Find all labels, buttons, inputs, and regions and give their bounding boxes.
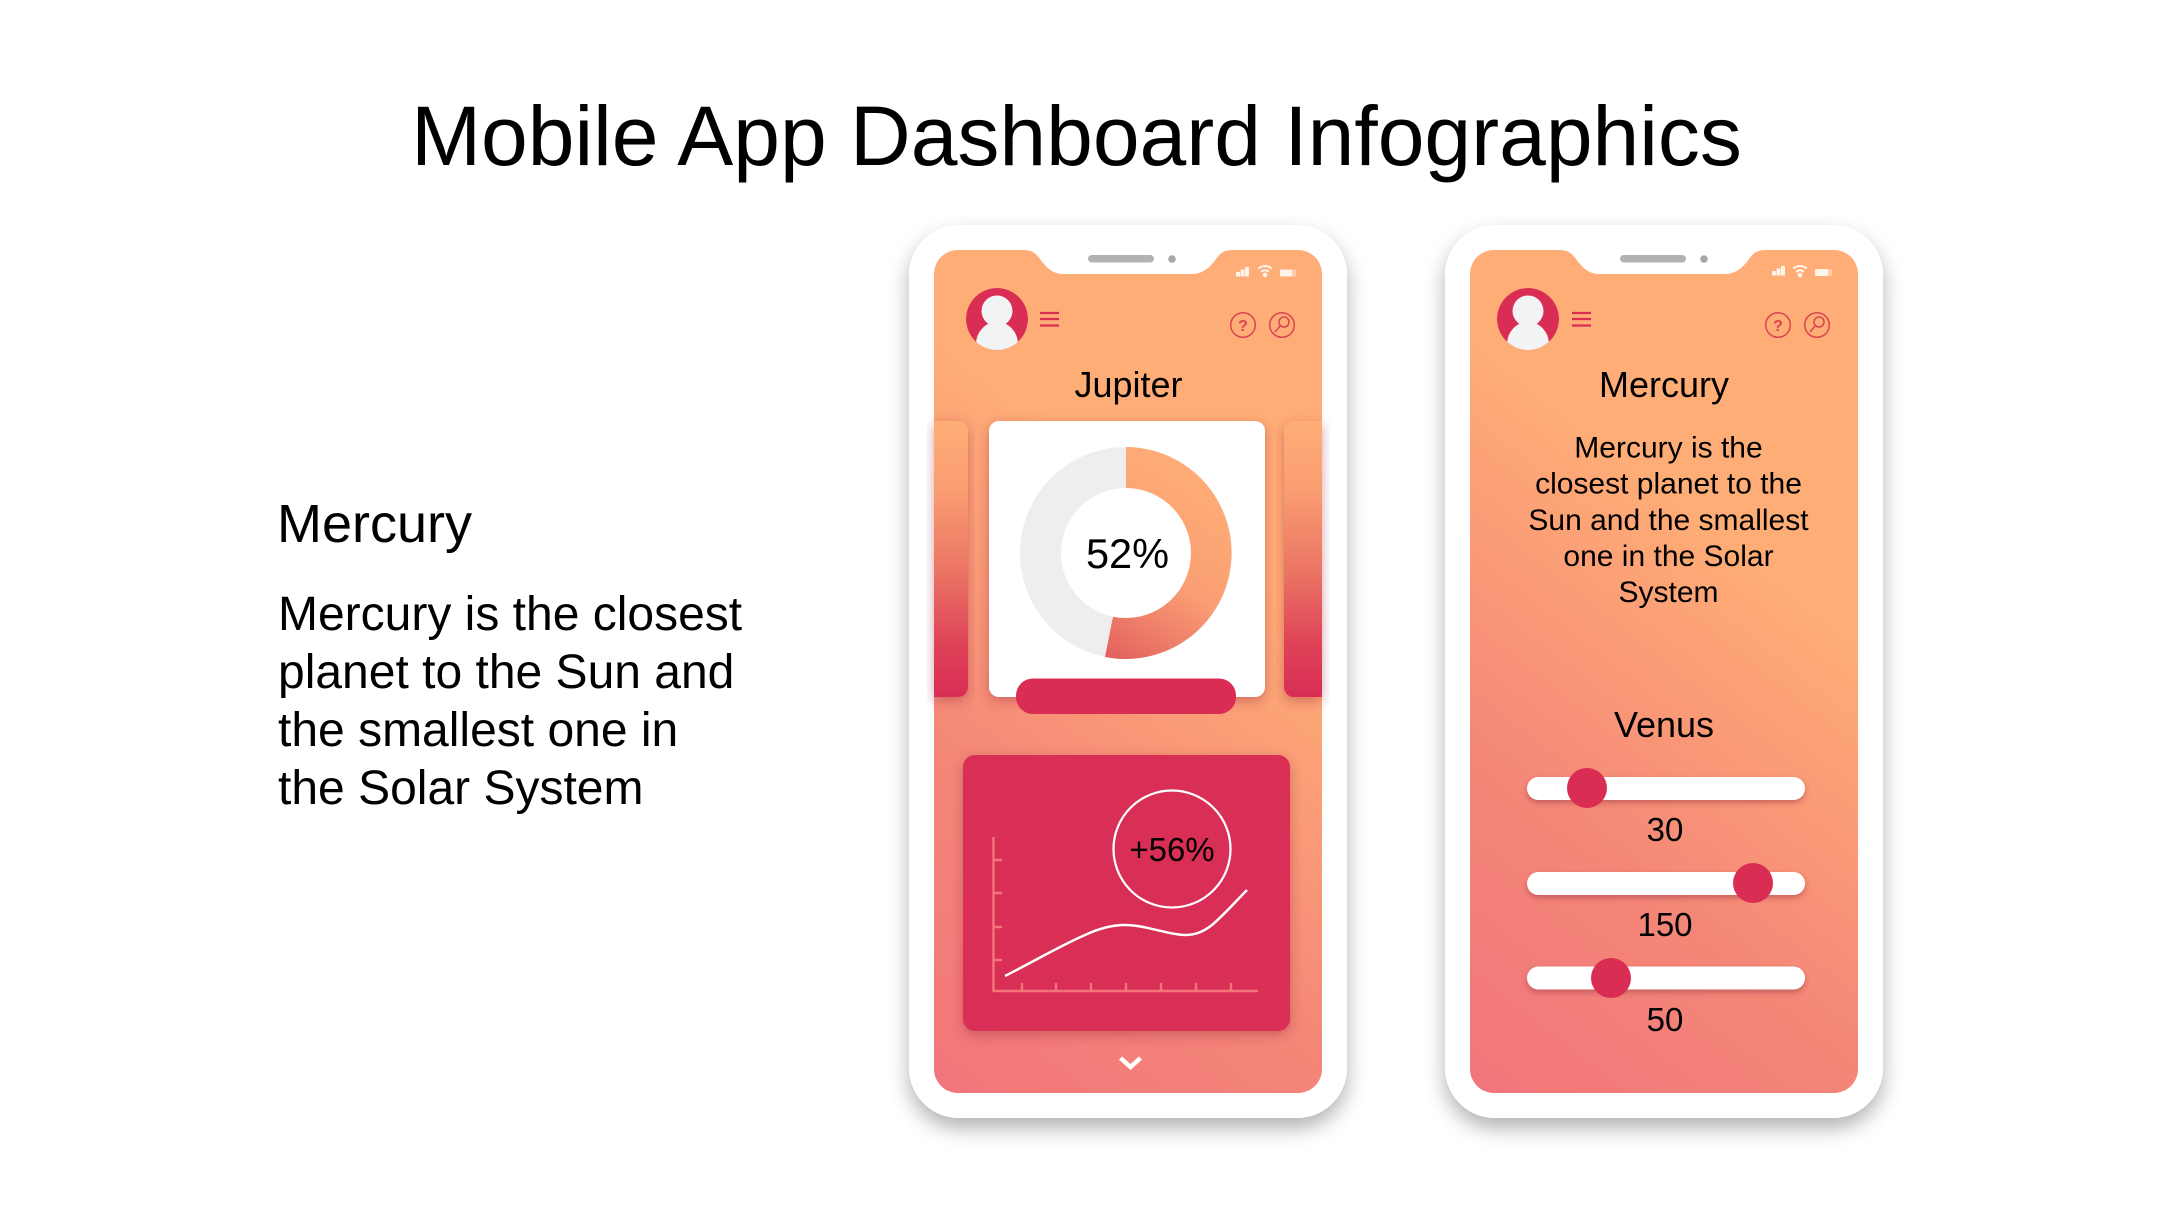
donut chart <box>1040 447 1231 659</box>
phone body <box>1445 225 1883 1118</box>
slider 50: 50 <box>1647 1001 1683 1038</box>
icon: help: ? <box>1238 318 1248 335</box>
description text: Sun and the smallest <box>1528 504 1809 537</box>
icon: avatar <box>1497 288 1559 350</box>
slider 150 <box>1527 863 1805 943</box>
heading: Mercury: Mercury <box>1599 364 1729 405</box>
body text: the Solar System <box>278 762 643 815</box>
callout value: +56% <box>1129 831 1215 868</box>
panel: phone Jupiter <box>909 225 1347 1118</box>
button <box>1016 678 1236 714</box>
slider 30 <box>1527 768 1805 848</box>
icon: status bar <box>1236 265 1296 277</box>
body text: the smallest one in <box>278 704 678 757</box>
donut value: 52% <box>1086 530 1169 577</box>
slider 30: 30 <box>1647 811 1683 848</box>
axes <box>994 837 1258 991</box>
chart background <box>963 755 1290 1031</box>
icon: status bar <box>1772 265 1832 277</box>
icon: search <box>1270 313 1294 337</box>
side card right <box>1284 421 1322 697</box>
icon: help <box>1766 313 1790 337</box>
title: Mobile App Dashboard Infographics <box>411 89 1742 183</box>
speaker <box>1620 255 1686 262</box>
icon: search <box>1805 313 1829 337</box>
text block: Mercury description <box>277 494 742 815</box>
callout circle <box>1114 790 1230 908</box>
icon: help <box>1231 313 1255 337</box>
description text: one in the Solar <box>1563 540 1774 573</box>
phone screen <box>1470 250 1858 1093</box>
icon: help: ? <box>1773 318 1783 335</box>
side card left <box>934 421 968 697</box>
description text: System <box>1618 576 1719 609</box>
icon: menu <box>1572 313 1591 326</box>
panel: line chart <box>963 755 1290 1031</box>
card background <box>989 421 1265 697</box>
camera <box>1168 255 1176 263</box>
speaker <box>1088 255 1154 262</box>
description text: closest planet to the <box>1535 468 1802 500</box>
phone screen <box>934 250 1322 1093</box>
card: donut <box>989 421 1265 697</box>
heading: Jupiter: Jupiter <box>1074 364 1183 405</box>
slider 50 <box>1527 958 1805 1038</box>
heading: Venus: Venus <box>1614 704 1714 745</box>
phone body <box>909 225 1347 1118</box>
heading: Mercury: Mercury <box>277 494 472 554</box>
icon: chevron down <box>1120 1058 1140 1067</box>
description text: Mercury is the <box>1574 432 1763 464</box>
slider 150: 150 <box>1637 906 1693 943</box>
trend line <box>1005 890 1247 976</box>
body text: planet to the Sun and <box>278 646 734 699</box>
icon: menu <box>1040 313 1059 326</box>
icon: avatar <box>966 288 1028 350</box>
panel: phone Mercury <box>1445 225 1883 1118</box>
camera <box>1700 255 1708 263</box>
body text: Mercury is the closest <box>278 588 742 641</box>
